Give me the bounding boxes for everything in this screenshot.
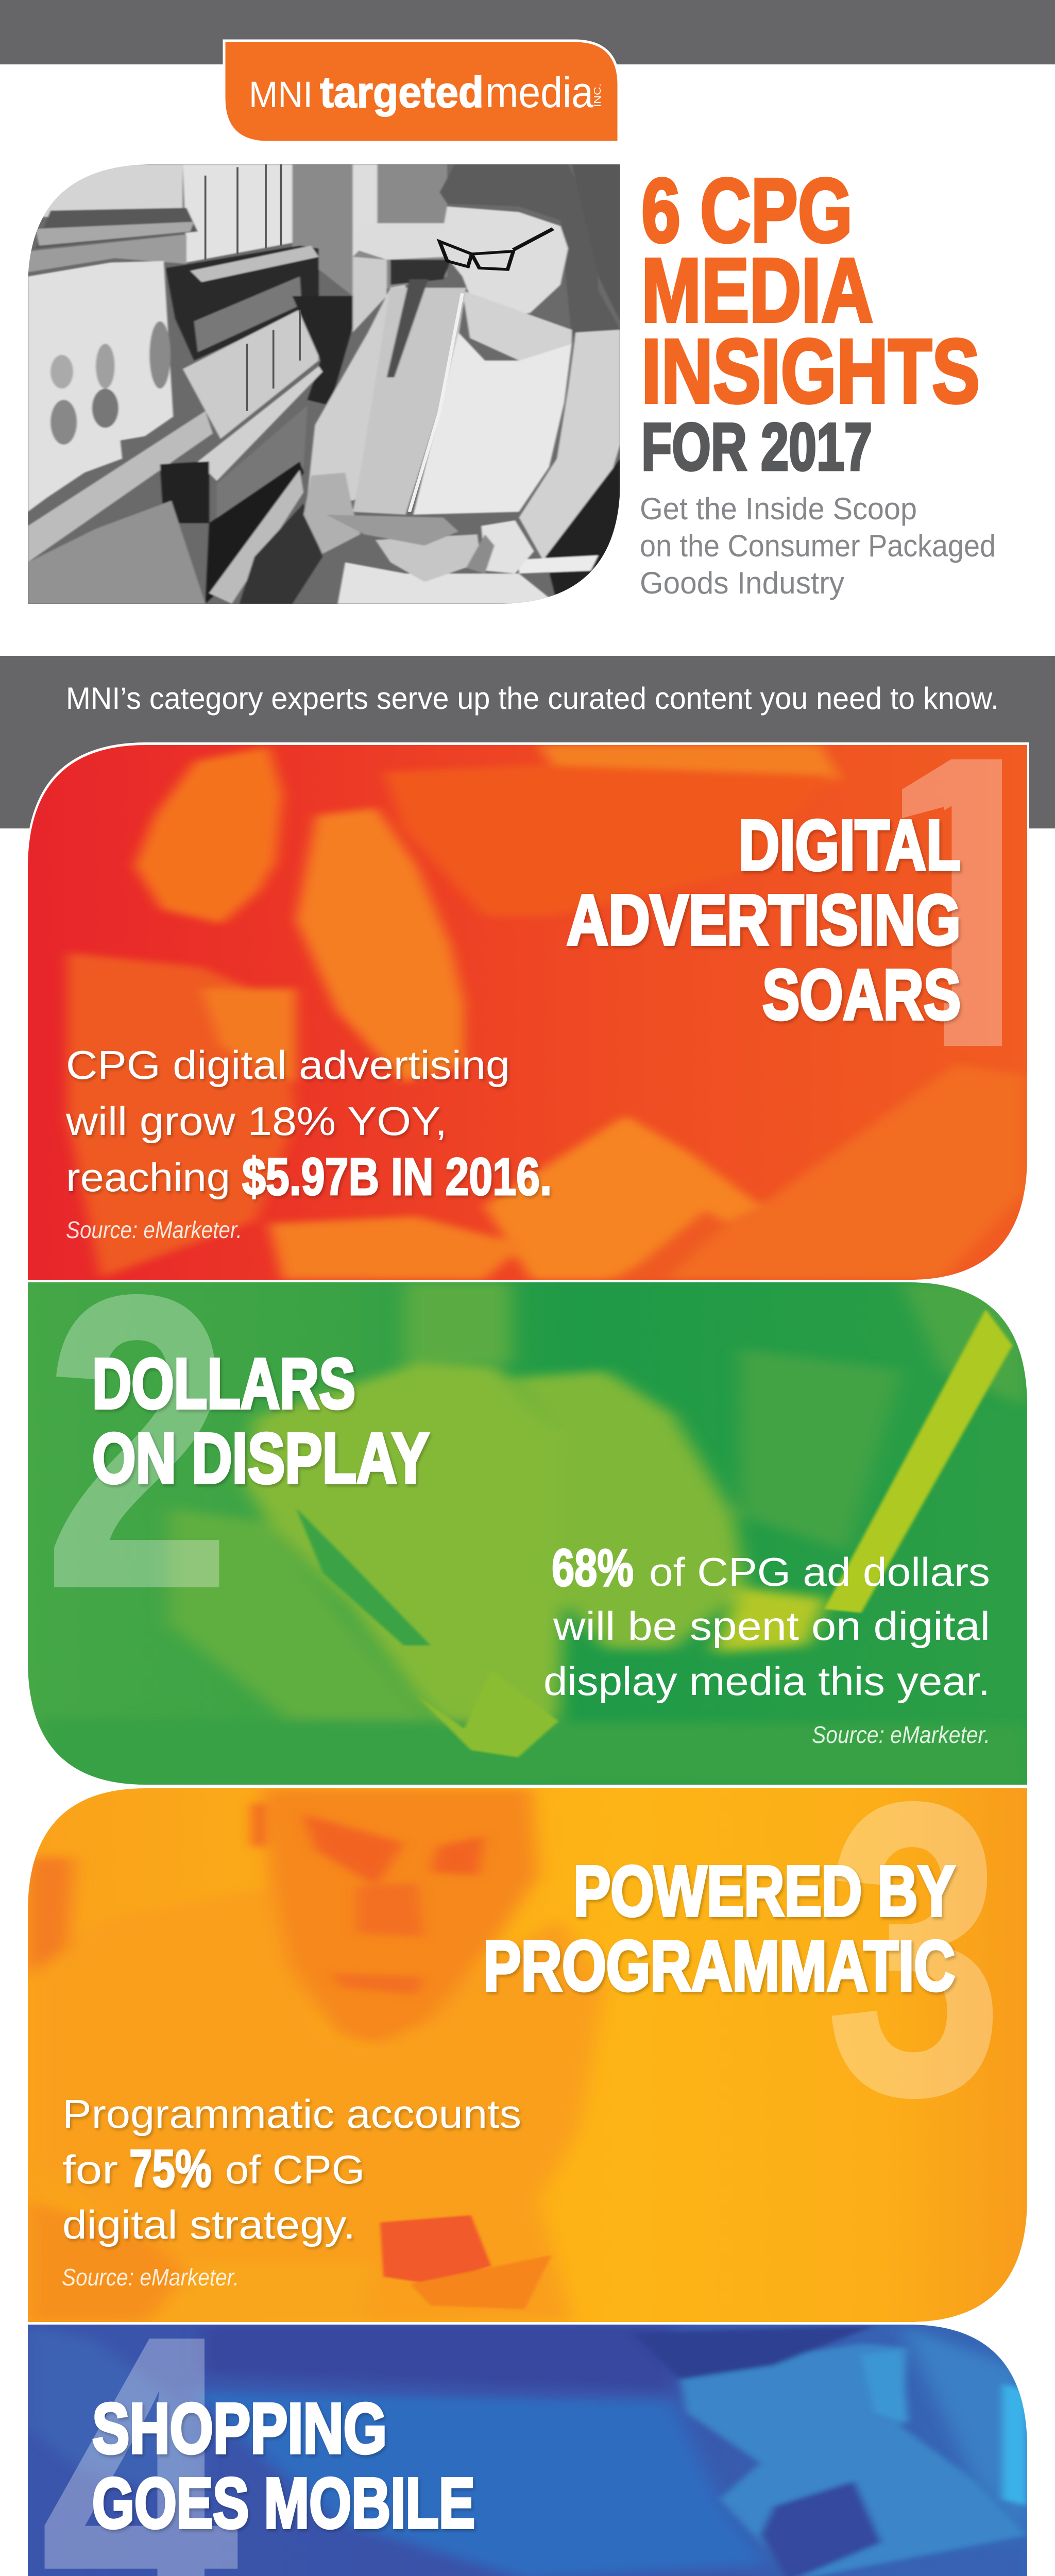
body copy 3: 75% bbox=[129, 2139, 212, 2198]
body copy 2: will be spent on digital bbox=[553, 1603, 990, 1649]
heading: shopping goes mobile: GOES MOBILE bbox=[92, 2464, 475, 2543]
body copy 1: reaching bbox=[66, 1155, 230, 1200]
heading: powered by programmatic bbox=[483, 1852, 955, 2006]
body copy 3: Programmatic accounts bbox=[62, 2091, 521, 2137]
panel: insight 2 dollars on display bbox=[28, 1282, 1027, 1785]
heading: powered by programmatic: POWERED BY bbox=[573, 1852, 955, 1931]
body copy 3: for bbox=[62, 2147, 118, 2192]
top gray band bbox=[0, 0, 1055, 64]
heading: digital advertising soars: SOARS bbox=[762, 955, 961, 1035]
main title: 6 CPG bbox=[641, 160, 853, 261]
big number 2: 2 bbox=[42, 1207, 233, 1676]
heading: dollars on display: ON DISPLAY bbox=[92, 1419, 429, 1498]
subtitle: Get the Inside Scoop bbox=[640, 492, 917, 526]
heading: shopping goes mobile bbox=[92, 2389, 475, 2543]
logo tab bbox=[224, 41, 619, 142]
main title: FOR 2017 bbox=[641, 409, 872, 484]
source 1: Source: eMarketer. bbox=[66, 1216, 242, 1243]
logo tab: MNI bbox=[249, 75, 313, 115]
body copy 2: 68% bbox=[552, 1538, 634, 1597]
body copy 1: will grow 18% YOY, bbox=[65, 1098, 447, 1144]
body copy 2: of CPG ad dollars bbox=[649, 1549, 990, 1595]
hero photo: shopper in aisle bbox=[28, 164, 620, 604]
panel: insight 4 shopping goes mobile bbox=[28, 2325, 1027, 2576]
body copy 1 bbox=[65, 1042, 552, 1206]
body copy 1: CPG digital advertising bbox=[66, 1042, 510, 1088]
intro sentence: MNI’s category experts serve up the curated content you need to know. bbox=[66, 681, 999, 716]
heading: dollars on display: DOLLARS bbox=[92, 1344, 355, 1423]
white outline of card 1 bbox=[26, 742, 1029, 869]
body copy 1: $5.97B IN 2016. bbox=[242, 1147, 552, 1206]
heading: digital advertising soars: ADVERTISING bbox=[567, 880, 961, 960]
gray intro band bbox=[0, 656, 1055, 828]
panel: insight 3 powered by programmatic bbox=[28, 1788, 1027, 2322]
heading: digital advertising soars: DIGITAL bbox=[739, 806, 961, 885]
source 3: Source: eMarketer. bbox=[62, 2264, 239, 2291]
heading: shopping goes mobile: SHOPPING bbox=[92, 2389, 387, 2468]
main title: MEDIA bbox=[641, 240, 873, 341]
heading: digital advertising soars bbox=[567, 806, 961, 1035]
subtitle bbox=[640, 492, 996, 600]
logo tab: media bbox=[485, 68, 593, 116]
subtitle: on the Consumer Packaged bbox=[640, 529, 996, 563]
body copy 3 bbox=[62, 2091, 521, 2247]
main title bbox=[641, 160, 980, 484]
body copy 2: display media this year. bbox=[543, 1658, 990, 1704]
source 2: Source: eMarketer. bbox=[812, 1721, 990, 1748]
heading: dollars on display bbox=[92, 1344, 429, 1498]
body copy 3: of CPG bbox=[225, 2147, 365, 2192]
body copy 3: digital strategy. bbox=[62, 2202, 355, 2247]
big number 3: 3 bbox=[824, 1714, 1005, 2183]
panel: insight 1 digital advertising bbox=[28, 666, 1055, 1280]
logo tab: INC. bbox=[592, 83, 603, 107]
logo tab: targeted bbox=[320, 68, 484, 116]
subtitle: Goods Industry bbox=[640, 566, 844, 600]
body copy 2 bbox=[543, 1538, 990, 1704]
